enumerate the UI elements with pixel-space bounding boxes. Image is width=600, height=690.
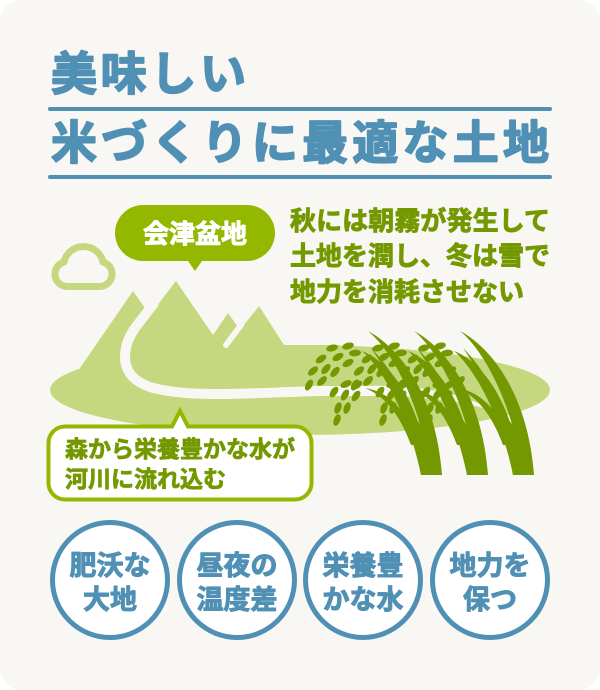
badge: soil fertility (432, 522, 548, 638)
title (48, 48, 552, 179)
callout box (48, 411, 312, 500)
rice plants (303, 331, 534, 475)
climate line 1: 秋には朝霧が発生して (290, 206, 550, 236)
landscape: mountains, fields and river (50, 281, 550, 435)
badge: rich water (306, 522, 420, 638)
rice grains left (303, 341, 375, 427)
badge text line 2: 保つ (463, 585, 517, 615)
text block: climate (290, 206, 550, 307)
badge circle (306, 522, 420, 638)
icon: cloud (55, 246, 112, 286)
title divider top (48, 107, 552, 111)
rice stem left (362, 331, 442, 475)
rice stem middle (408, 331, 488, 475)
callout bubble (115, 205, 275, 271)
rice stem right (454, 331, 534, 475)
climate line 3: 地力を消耗させない (290, 277, 524, 307)
badge: fertile land (52, 522, 168, 638)
rice grains middle (349, 341, 421, 427)
field (50, 345, 550, 435)
title line 1: 美味しい (51, 48, 246, 100)
badge text line 2: 大地 (83, 585, 137, 615)
callout: Aizu basin (115, 205, 275, 271)
badge text line 1: 栄養豊 (322, 551, 404, 581)
callout text line 1: 森から栄養豊かな水が (65, 436, 295, 462)
badge text line 2: 温度差 (196, 585, 278, 615)
river tapered end (370, 386, 497, 413)
title line 2: 米づくりに最適な土地 (51, 117, 549, 169)
title divider bottom (48, 175, 552, 179)
callout text line 2: 河川に流れ込む (65, 466, 226, 492)
badge: temperature difference (180, 522, 294, 638)
badge circle (52, 522, 168, 638)
rice grains right (395, 341, 467, 427)
callout: forest river (48, 411, 312, 500)
climate line 2: 土地を潤し、冬は雪で (290, 241, 550, 271)
badge circle (432, 522, 548, 638)
badge text line 1: 肥沃な (70, 551, 150, 581)
callout label: 会津盆地 (143, 219, 247, 249)
badge text line 1: 昼夜の (196, 551, 278, 581)
badge text line 1: 地力を (450, 551, 530, 581)
river main channel (125, 302, 370, 394)
badge text line 2: かな水 (322, 585, 404, 615)
badge circle (180, 522, 294, 638)
mountains (80, 281, 340, 400)
river tributary (226, 325, 241, 345)
